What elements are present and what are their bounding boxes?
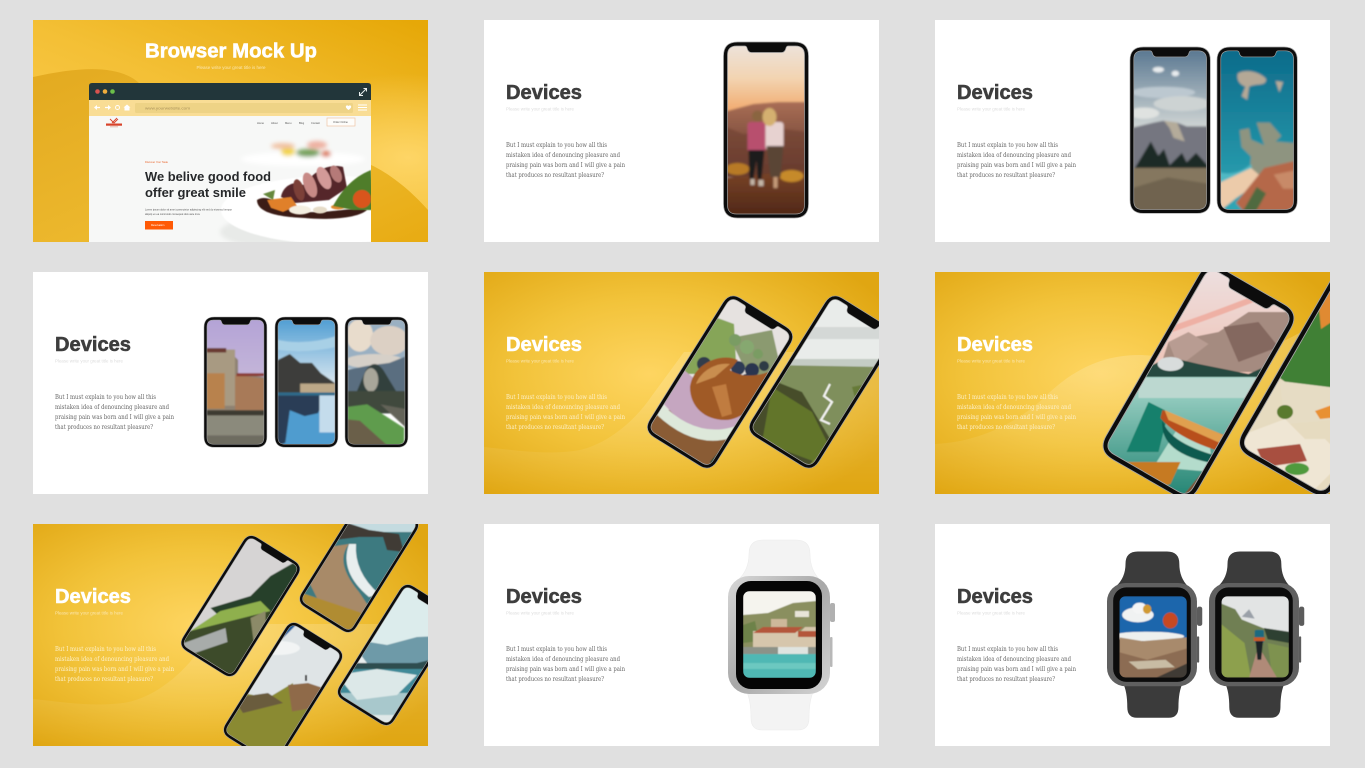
browser window xyxy=(89,83,371,242)
slide text: Devices xyxy=(957,333,1033,356)
slide text: praising pain was born and I will give a pain xyxy=(506,161,625,169)
watch screen: hiker xyxy=(1221,596,1289,678)
watch screen: harbour town xyxy=(743,591,816,678)
slide 5: two tilted phones on gold xyxy=(484,272,879,494)
slide text xyxy=(506,333,625,431)
phone: turquoise mountain lake xyxy=(322,580,472,730)
slide text: Please write your great title is here xyxy=(506,610,575,616)
slide text: mistaken idea of denouncing pleasure and xyxy=(957,151,1071,159)
slide 8: silver watch xyxy=(484,524,879,746)
watch: hot air balloons xyxy=(1107,552,1202,718)
hero button xyxy=(145,221,173,230)
slide text: But I must explain to you how all this xyxy=(957,141,1058,149)
slide 2: single phone xyxy=(484,20,879,242)
phone: forest bridge xyxy=(166,531,316,681)
slide text: that produces no resultant pleasure? xyxy=(506,171,604,179)
phone: couple at sunset xyxy=(724,42,808,218)
website page xyxy=(89,116,371,242)
watch screen: balloons xyxy=(1110,596,1187,678)
watch: hiker on trail xyxy=(1209,552,1304,718)
slide text: Devices xyxy=(506,585,582,608)
slide text: Please write your great title is here xyxy=(55,610,124,616)
logo xyxy=(106,118,122,127)
slide text: that produces no resultant pleasure? xyxy=(506,675,604,683)
slide 9: two dark watches xyxy=(935,524,1330,746)
phone: Machu Picchu xyxy=(345,317,409,447)
hero paragraph: aliquip ex ea commodo consequat duis aute irure xyxy=(145,213,201,216)
slide text: that produces no resultant pleasure? xyxy=(957,675,1055,683)
slide text xyxy=(55,333,174,431)
slide text: But I must explain to you how all this xyxy=(506,393,607,401)
phone: green valley river xyxy=(749,296,879,468)
slide text: Please write your great title is here xyxy=(957,358,1026,364)
slide text: praising pain was born and I will give a pain xyxy=(55,665,174,673)
main food plate xyxy=(221,164,371,242)
browser toolbar: www.yourwebsite.com xyxy=(145,106,191,110)
slide text: Devices xyxy=(957,81,1033,104)
slide text: Please write your great title is here xyxy=(55,358,124,364)
navigation: Order Online xyxy=(333,120,348,124)
slide text: But I must explain to you how all this xyxy=(957,645,1058,653)
slide text: Please write your great title is here xyxy=(506,106,575,112)
light wave xyxy=(484,352,879,470)
slide text: praising pain was born and I will give a pain xyxy=(506,665,625,673)
slide text xyxy=(957,333,1076,431)
slide 3: two phones xyxy=(935,20,1330,242)
phone: food bowl xyxy=(1239,280,1330,494)
slide text: Devices xyxy=(506,81,582,104)
slide 1: browser mock up xyxy=(33,20,428,242)
slide text xyxy=(55,585,174,683)
slide text: But I must explain to you how all this xyxy=(957,393,1058,401)
slide text: mistaken idea of denouncing pleasure and xyxy=(55,655,169,663)
slide text: Devices xyxy=(506,333,582,356)
phone: palm pool xyxy=(275,317,338,447)
phone: croissant xyxy=(647,296,793,468)
hero paragraph: Lorem ipsum dolor sit amet consectetur adipiscing elit sed do eiusmod tempor xyxy=(145,208,232,212)
phone: alpine lake and boats xyxy=(1102,272,1294,494)
slide text: praising pain was born and I will give a pain xyxy=(55,413,174,421)
hero headline: offer great smile xyxy=(145,185,246,200)
slide text: mistaken idea of denouncing pleasure and xyxy=(506,151,620,159)
phone: aerial coast xyxy=(1217,47,1297,213)
phone: rocky cliff under clouds xyxy=(208,618,358,767)
navigation: About xyxy=(271,121,278,125)
slide text xyxy=(957,585,1076,683)
navigation: Home xyxy=(257,121,264,125)
slide text: But I must explain to you how all this xyxy=(506,645,607,653)
slide 6: large tilted phones on gold xyxy=(935,272,1330,494)
slide text: mistaken idea of denouncing pleasure and xyxy=(506,655,620,663)
blurred background plate xyxy=(270,138,332,159)
hero button: Reservation xyxy=(151,224,165,227)
slide text: Please write your great title is here xyxy=(957,610,1026,616)
slide text: mistaken idea of denouncing pleasure and xyxy=(957,655,1071,663)
browser title bar xyxy=(89,83,371,100)
slide text: Devices xyxy=(957,585,1033,608)
slide text: praising pain was born and I will give a pain xyxy=(957,413,1076,421)
slide text: Devices xyxy=(55,585,131,608)
gold wave background xyxy=(33,69,428,242)
browser toolbar xyxy=(89,100,371,116)
hero paragraph xyxy=(145,208,232,216)
slide text: But I must explain to you how all this xyxy=(55,393,156,401)
navigation: Contact xyxy=(311,121,320,125)
slide text: that produces no resultant pleasure? xyxy=(957,171,1055,179)
slide text xyxy=(506,81,625,179)
slide text: that produces no resultant pleasure? xyxy=(55,423,153,431)
phone: sea arch beach xyxy=(284,487,434,637)
slide 4: three phones xyxy=(33,272,428,494)
slide text: Please write your great title is here xyxy=(957,106,1026,112)
phone: mountain dome xyxy=(1129,47,1210,213)
slide text xyxy=(506,585,625,683)
slide text: Devices xyxy=(55,333,131,356)
hero headline: We belive good food xyxy=(145,169,271,184)
slide text: praising pain was born and I will give a pain xyxy=(957,161,1076,169)
slide text: mistaken idea of denouncing pleasure and xyxy=(55,403,169,411)
subtitle: Please write your great title is here xyxy=(196,65,266,70)
slide text: praising pain was born and I will give a pain xyxy=(506,413,625,421)
slide text: But I must explain to you how all this xyxy=(506,141,607,149)
slide text: praising pain was born and I will give a pain xyxy=(957,665,1076,673)
phone: Venice canal xyxy=(204,317,267,447)
slide text: that produces no resultant pleasure? xyxy=(506,423,604,431)
slide text: mistaken idea of denouncing pleasure and xyxy=(506,403,620,411)
navigation: Menu xyxy=(285,121,292,125)
slide text: that produces no resultant pleasure? xyxy=(55,675,153,683)
hero small label: Discover Your Taste xyxy=(145,160,168,164)
hero headline xyxy=(145,172,270,200)
navigation xyxy=(257,118,355,126)
light wave xyxy=(33,624,428,722)
slide text: But I must explain to you how all this xyxy=(55,645,156,653)
slide text: that produces no resultant pleasure? xyxy=(957,423,1055,431)
slide 7: four tilted phones on gold xyxy=(33,524,428,746)
watch: white band xyxy=(728,540,835,730)
navigation: Blog xyxy=(299,121,305,125)
light wave xyxy=(935,332,1300,464)
slide text: Please write your great title is here xyxy=(506,358,575,364)
slide text: mistaken idea of denouncing pleasure and xyxy=(957,403,1071,411)
title: Browser Mock Up xyxy=(145,40,317,62)
slide text xyxy=(957,81,1076,179)
